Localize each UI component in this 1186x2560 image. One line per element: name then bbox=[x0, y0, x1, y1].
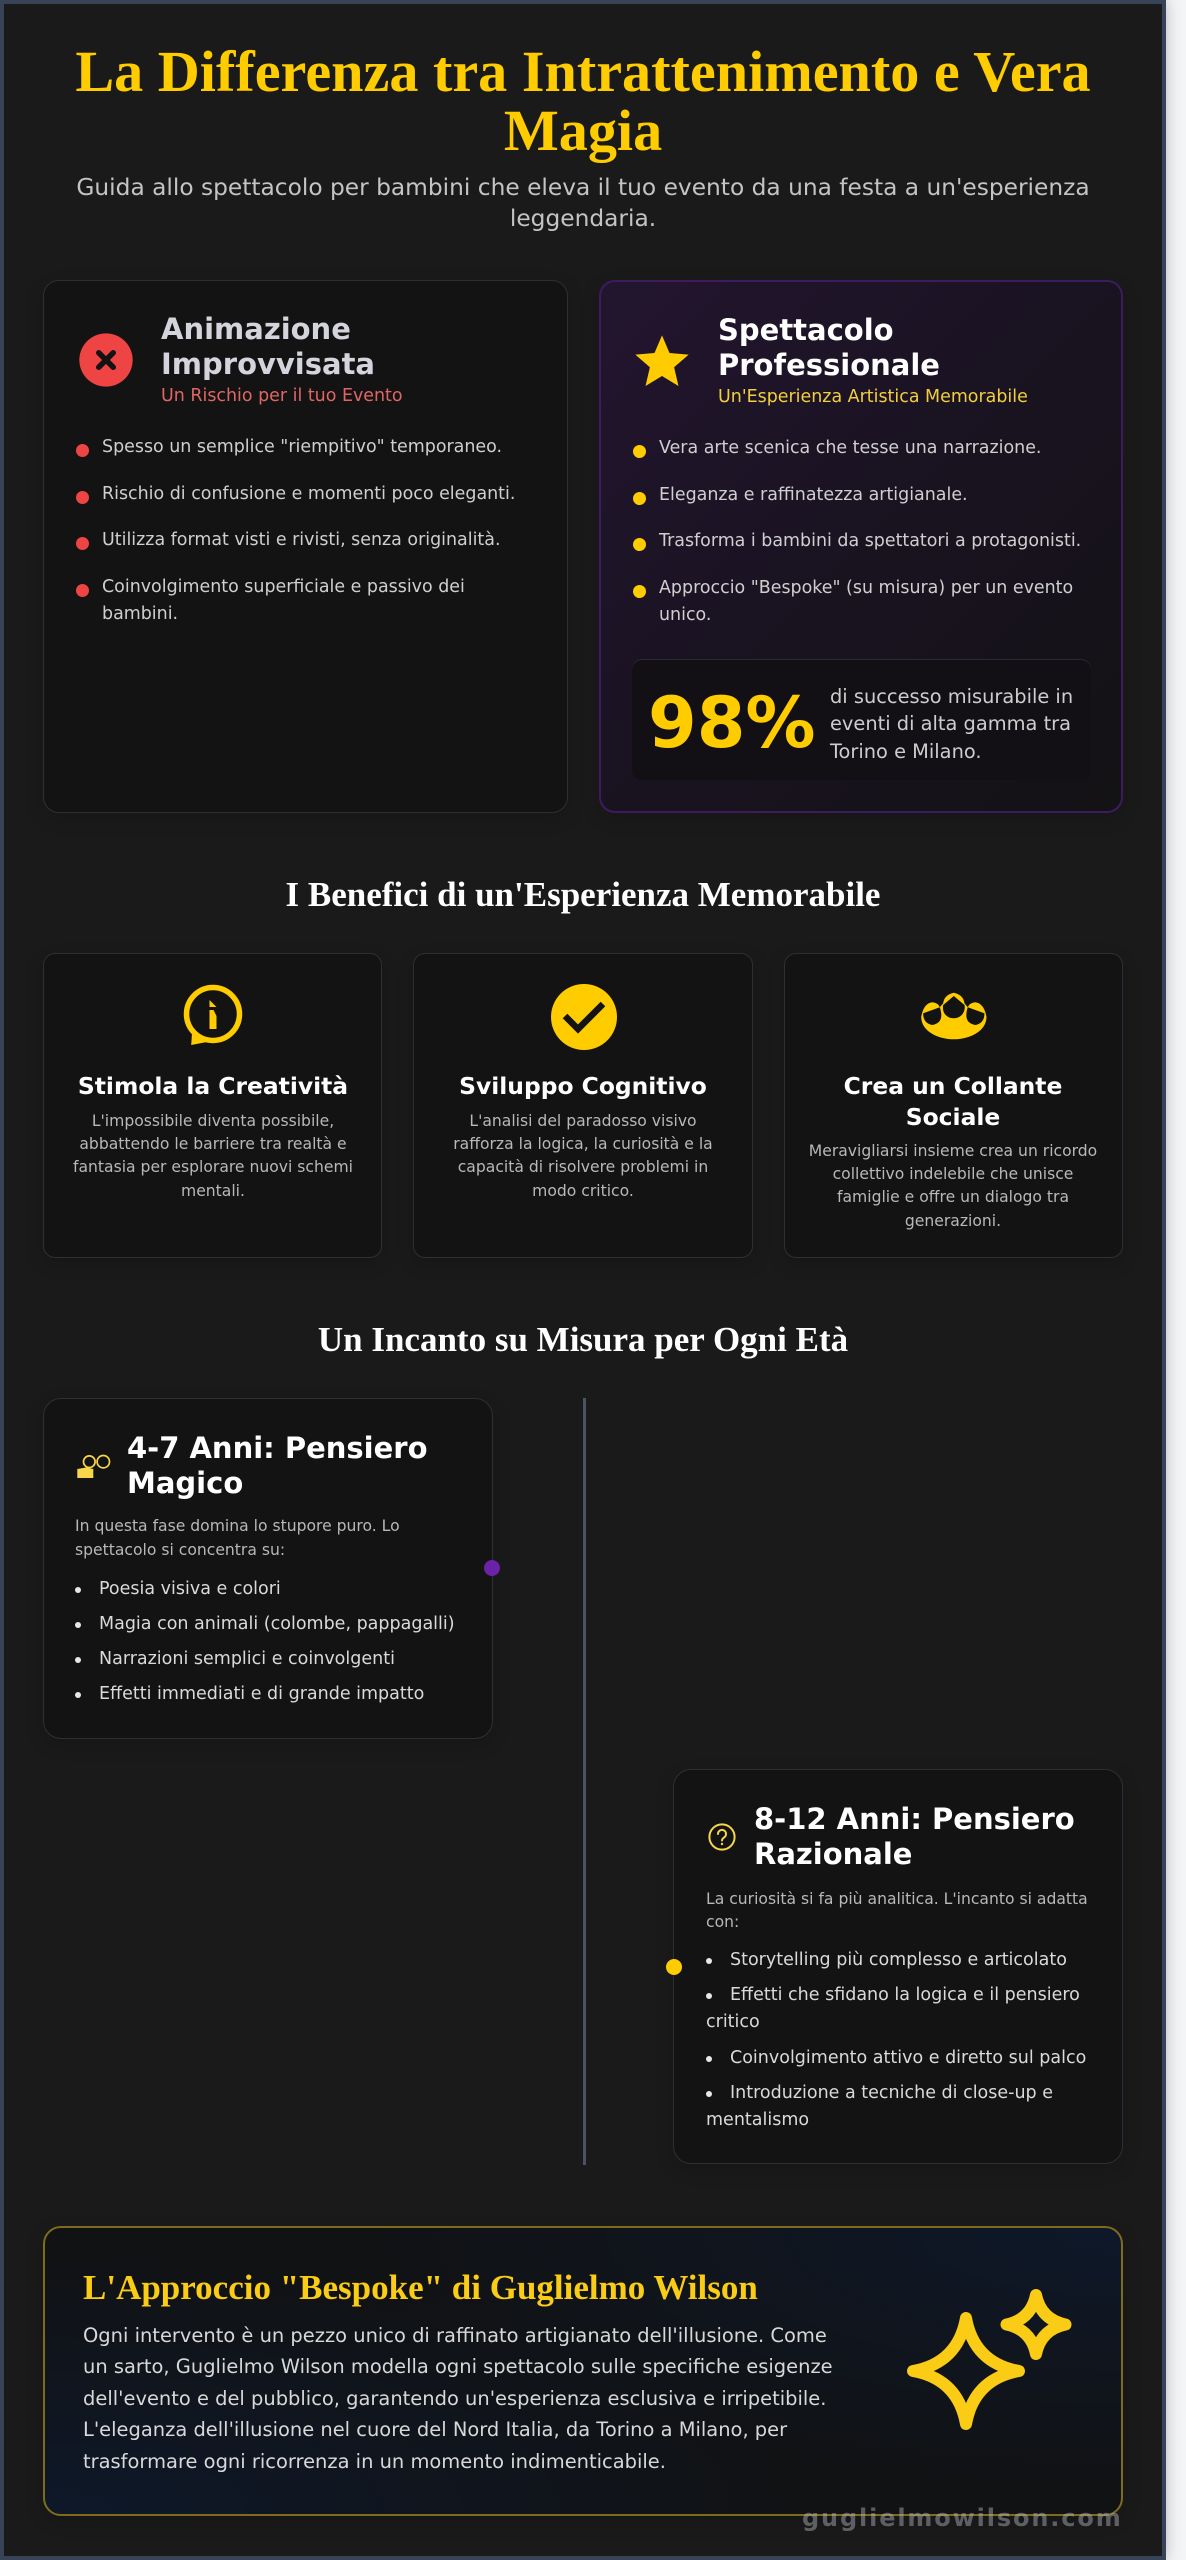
list: 4-7 features: Narrazioni semplici e coinvolgenti bbox=[99, 1648, 395, 1668]
heading: spettacolo professionale: Professionale bbox=[718, 348, 940, 382]
list: 4-7 features: Magia con animali (colombe, pappagalli) bbox=[99, 1614, 455, 1634]
description: fantasia per esplorare nuovi schemi bbox=[73, 1158, 353, 1176]
icon: star bbox=[635, 336, 689, 386]
icon: crown bbox=[921, 992, 986, 1040]
list: 8-12 features: Coinvolgimento attivo e diretto sul palco bbox=[730, 2048, 1086, 2068]
body text: L'eleganza dell'illusione nel cuore del Nord Italia, da Torino a Milano, per bbox=[83, 2418, 787, 2441]
intro text: con: bbox=[706, 1913, 739, 1931]
panel: approccio bespoke bbox=[43, 2226, 1123, 2516]
list: 4-7 features bbox=[75, 1578, 455, 1704]
stat box: 98% bbox=[632, 659, 1091, 780]
stat description: di successo misurabile in bbox=[830, 685, 1073, 708]
heading bbox=[754, 1802, 1075, 1871]
description: collettivo indelebile che unisce bbox=[833, 1165, 1073, 1183]
description: L'impossibile diventa possibile, bbox=[92, 1112, 334, 1130]
list: 8-12 features: Storytelling più complesso e articolato bbox=[730, 1950, 1067, 1970]
list: advantages: Approccio "Bespoke" (su misura) per un evento bbox=[659, 578, 1073, 598]
list: advantages bbox=[633, 438, 1081, 625]
description bbox=[453, 1112, 713, 1200]
body text: un sarto, Guglielmo Wilson modella ogni spettacolo sulle specifiche esigenze bbox=[83, 2355, 833, 2378]
list: risks bbox=[76, 436, 515, 624]
heading: spettacolo professionale bbox=[718, 313, 940, 382]
icon: question mark bbox=[708, 1823, 736, 1851]
subtitle bbox=[76, 174, 1090, 232]
panel: spettacolo professionale bbox=[599, 280, 1123, 813]
heading: 4-7 Anni: Pensiero bbox=[127, 1431, 428, 1465]
list: advantages: Trasforma i bambini da spettatori a protagonisti. bbox=[659, 530, 1081, 550]
icon: sparkles bbox=[907, 2289, 1072, 2430]
icon: speech bubble bbox=[184, 984, 242, 1045]
description: famiglie e offre un dialogo tra bbox=[837, 1188, 1069, 1206]
list: 8-12 features: Effetti che sfidano la logica e il pensiero bbox=[730, 1984, 1080, 2004]
heading: animazione improvvisata: Animazione bbox=[161, 312, 351, 346]
list: 4-7 features: Poesia visiva e colori bbox=[99, 1578, 281, 1598]
subheading: esperienza: Un'Esperienza Artistica Memorabile bbox=[718, 387, 1028, 407]
description bbox=[809, 1142, 1097, 1230]
intro text bbox=[706, 1890, 1088, 1931]
description: L'analisi del paradosso visivo bbox=[469, 1112, 697, 1130]
timeline dot: yellow bbox=[666, 1959, 682, 1975]
heading: spettacolo professionale: Spettacolo bbox=[718, 313, 894, 347]
list: 8-12 features bbox=[706, 1950, 1086, 2130]
body text bbox=[83, 2324, 833, 2473]
subtitle: leggendaria. bbox=[510, 205, 656, 232]
heading: Sviluppo Cognitivo bbox=[459, 1072, 707, 1100]
title bbox=[75, 39, 1091, 163]
heading: Stimola la Creatività bbox=[78, 1072, 348, 1100]
panel: sviluppo cognitivo bbox=[413, 953, 753, 1258]
panel: collante sociale bbox=[784, 953, 1123, 1258]
heading bbox=[844, 1072, 1062, 1131]
title: La Differenza tra Intrattenimento e Vera bbox=[75, 39, 1091, 104]
stat description: eventi di alta gamma tra bbox=[830, 712, 1071, 735]
heading: L'Approccio "Bespoke" di Guglielmo Wilson bbox=[83, 2268, 758, 2307]
watermark: guglielmowilson.com bbox=[802, 2504, 1123, 2532]
title: Magia bbox=[504, 98, 662, 163]
description: mentali. bbox=[181, 1182, 245, 1200]
description bbox=[73, 1112, 353, 1200]
list: 4-7 features: Effetti immediati e di grande impatto bbox=[99, 1684, 424, 1704]
timeline axis bbox=[583, 1398, 586, 2165]
heading: Sociale bbox=[906, 1103, 1000, 1131]
icon: red cross bbox=[79, 333, 133, 387]
list: advantages: unico. bbox=[659, 605, 711, 625]
description: abbattendo le barriere tra realtà e bbox=[79, 1135, 347, 1153]
timeline dot: purple bbox=[484, 1560, 500, 1576]
panel: creatività bbox=[43, 953, 382, 1258]
list: risks: Utilizza format visti e rivisti, senza originalità. bbox=[102, 530, 500, 550]
body text: Ogni intervento è un pezzo unico di raffinato artigianato dell'illusione. Come bbox=[83, 2324, 827, 2346]
subtitle: Guida allo spettacolo per bambini che eleva il tuo evento da una festa a un'esperienza bbox=[76, 174, 1090, 200]
heading: Magico bbox=[127, 1466, 243, 1500]
heading: 8-12 Anni: Pensiero bbox=[754, 1802, 1075, 1836]
body text: trasformare ogni ricorrenza in un momento indimenticabile. bbox=[83, 2450, 666, 2473]
body text: dell'evento e del pubblico, garantendo un'esperienza esclusiva e irripetibile. bbox=[83, 2387, 826, 2410]
section heading: età: Un Incanto su Misura per Ogni Età bbox=[318, 1320, 848, 1359]
panel: animazione improvvisata bbox=[43, 280, 568, 813]
subheading: rischio: Un Rischio per il tuo Evento bbox=[161, 386, 403, 406]
list: advantages: Vera arte scenica che tesse una narrazione. bbox=[659, 438, 1041, 458]
intro text: In questa fase domina lo stupore puro. Lo bbox=[75, 1517, 400, 1535]
intro text: spettacolo si concentra su: bbox=[75, 1541, 285, 1559]
stat description: Torino e Milano. bbox=[830, 740, 982, 763]
panel: 8-12 anni bbox=[673, 1769, 1123, 2164]
list: risks: bambini. bbox=[102, 604, 178, 624]
heading: Razionale bbox=[754, 1837, 912, 1871]
description: capacità di risolvere problemi in bbox=[458, 1158, 708, 1176]
list: risks: Spesso un semplice "riempitivo" temporaneo. bbox=[102, 436, 502, 456]
icon: check bbox=[551, 984, 617, 1050]
list: 8-12 features: critico bbox=[706, 2012, 760, 2032]
list: 8-12 features: mentalismo bbox=[706, 2110, 809, 2130]
section heading: benefici: I Benefici di un'Esperienza Memorabile bbox=[286, 875, 880, 914]
heading: animazione improvvisata: Improvvisata bbox=[161, 347, 375, 381]
description: rafforza la logica, la curiosità e la bbox=[453, 1135, 713, 1153]
description: generazioni. bbox=[905, 1212, 1001, 1230]
list: 8-12 features: Introduzione a tecniche di close-up e bbox=[730, 2082, 1053, 2102]
list: risks: Rischio di confusione e momenti poco eleganti. bbox=[102, 484, 515, 504]
stat description bbox=[830, 685, 1073, 763]
stat number: 98% bbox=[648, 682, 816, 764]
intro text: La curiosità si fa più analitica. L'incanto si adatta bbox=[706, 1890, 1088, 1908]
description: modo critico. bbox=[532, 1182, 634, 1200]
intro text bbox=[75, 1517, 400, 1559]
heading: animazione improvvisata bbox=[161, 312, 375, 381]
list: advantages: Eleganza e raffinatezza artigianale. bbox=[659, 484, 968, 504]
heading: Crea un Collante bbox=[844, 1072, 1062, 1100]
icon: rings and bag bbox=[77, 1454, 110, 1478]
heading bbox=[127, 1431, 428, 1500]
list: risks: Coinvolgimento superficiale e passivo dei bbox=[102, 576, 465, 596]
description: Meravigliarsi insieme crea un ricordo bbox=[809, 1142, 1097, 1160]
panel: 4-7 anni bbox=[43, 1398, 493, 1739]
